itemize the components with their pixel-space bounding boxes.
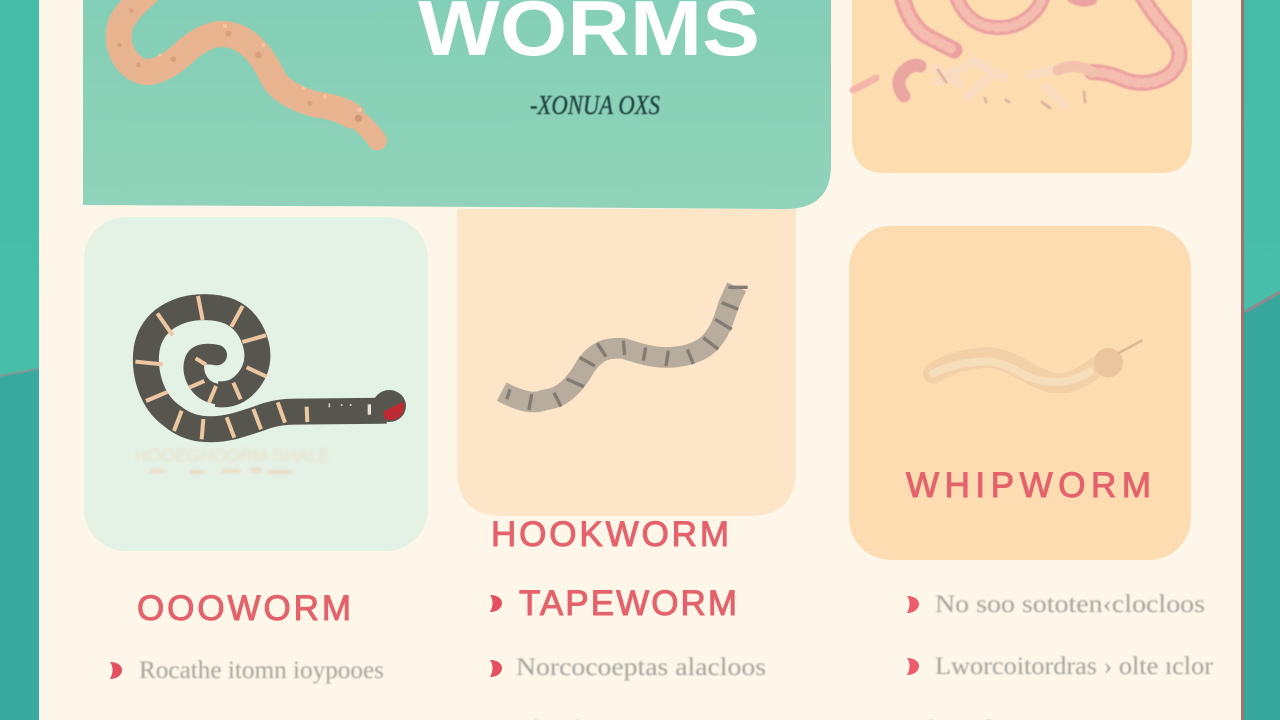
label: hookworm: HOOKWORM [491, 515, 729, 554]
label: tapeworm: TAPEWORM [519, 584, 737, 623]
faint caption beneath worm: HOOEGHOORM SHALE [135, 446, 330, 467]
bullet list: right column: No soo sototen‹clocloos [935, 591, 1205, 618]
label: oooworm: OOOWORM [137, 589, 351, 628]
panel: hookworm card [457, 209, 796, 516]
icon: pink segmented worm [853, 0, 1180, 108]
bullet list: left column: Rocathe itomn ioypooes [139, 657, 384, 684]
panel: roundworm card [84, 217, 428, 551]
panel: title header [83, 0, 831, 209]
bullet list: middle column: Norcocoeptas alacloos [516, 654, 766, 681]
label: whipworm: WHIPWORM [906, 466, 1151, 505]
subtitle: -XONUA OXS [530, 90, 660, 120]
icon: pale whipworm [933, 341, 1142, 384]
bullet list: right column: Lworcoitordras › olte ıclor [935, 653, 1214, 680]
bullet list: right column [905, 591, 1214, 720]
panel: whipworm card [849, 226, 1191, 560]
icon: coiled dark worm [135, 296, 406, 439]
panel: top right worm card [852, 0, 1192, 173]
bullet list: middle column [490, 595, 766, 720]
icon: grey banded worm [502, 287, 748, 410]
icon: tan worm [117, 0, 377, 141]
